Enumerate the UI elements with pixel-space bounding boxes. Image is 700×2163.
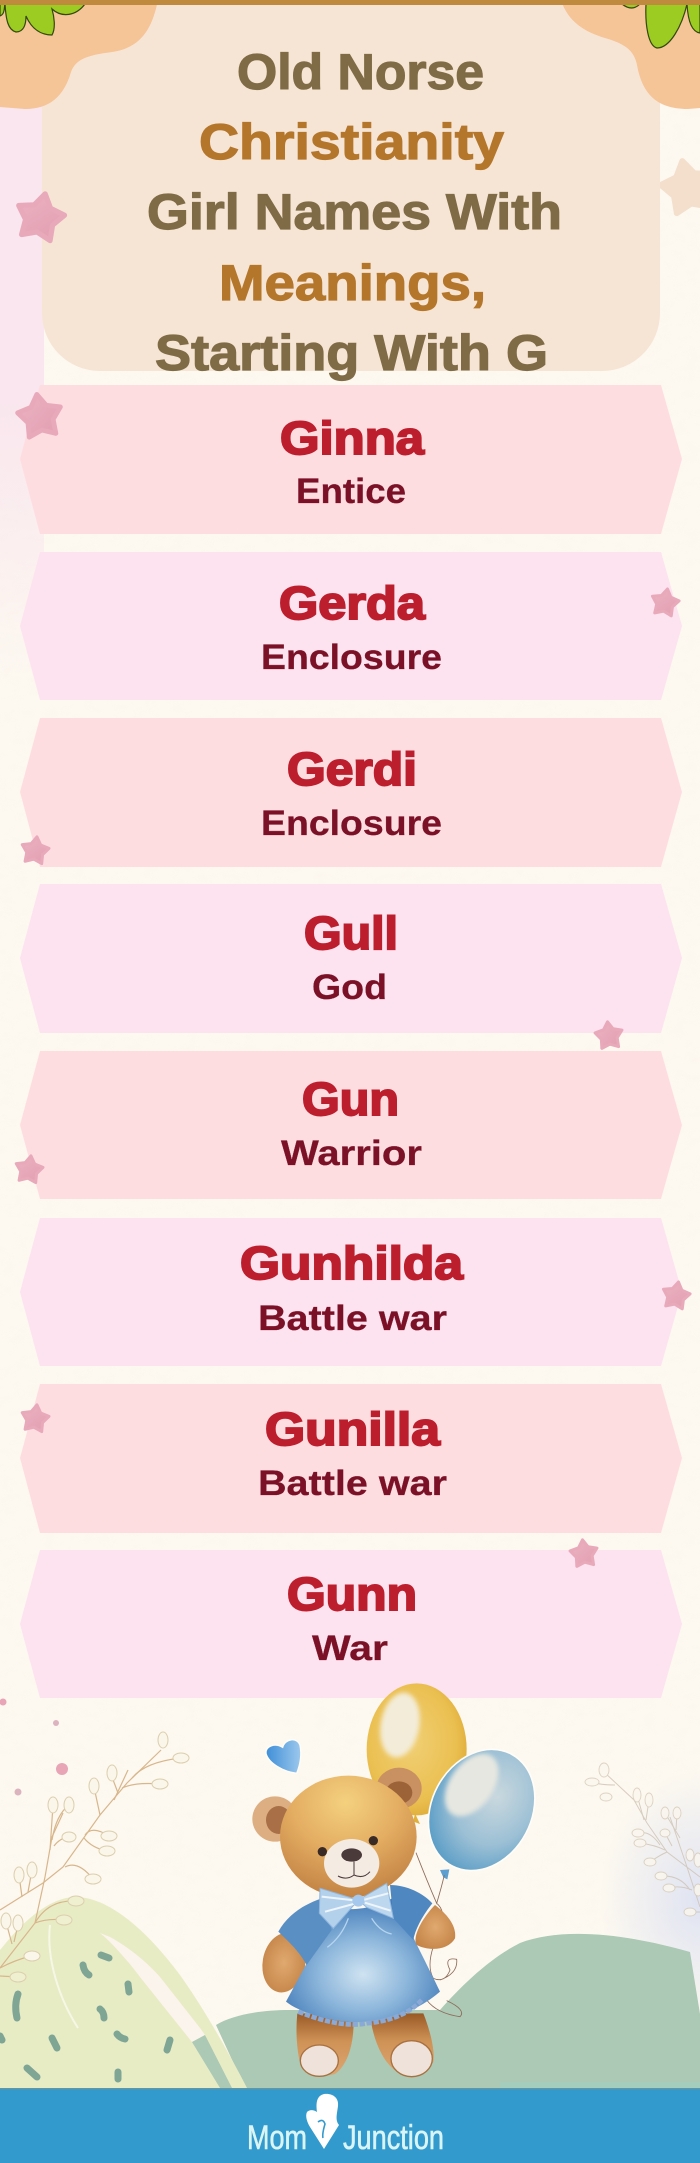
star: beige right of title	[657, 156, 700, 215]
name card: Gunhilda	[20, 1218, 682, 1366]
name card: Gunilla: Gunilla	[265, 1403, 440, 1455]
name card: Gerdi	[20, 718, 682, 867]
title: Old Norse	[237, 44, 484, 100]
icon: blue heart	[266, 1740, 301, 1773]
ear: right	[376, 1768, 422, 1809]
name card: Ginna: Entice	[296, 472, 406, 511]
hand: right	[415, 1905, 455, 1949]
muzzle	[324, 1839, 379, 1888]
name card: Gerda: Gerda	[279, 577, 425, 629]
name card: Gunilla	[20, 1384, 682, 1533]
title	[147, 44, 562, 381]
name card: Gun: Warrior	[281, 1134, 422, 1173]
name card: Gunilla: Battle war	[258, 1464, 447, 1503]
legs	[296, 2013, 434, 2077]
teal hill	[216, 1934, 700, 2088]
name card: Gunn: War	[312, 1629, 388, 1668]
bow	[319, 1883, 393, 1947]
name card: Gunn	[20, 1550, 682, 1698]
logo: MomJunction	[247, 2094, 444, 2157]
branch: right	[585, 1763, 700, 1916]
footer	[0, 2082, 700, 2163]
name card: Gerda	[20, 552, 682, 700]
title: Meanings,	[219, 255, 486, 311]
corner blob: left	[0, 0, 158, 109]
name card: Gunhilda: Battle war	[258, 1299, 447, 1338]
name card: Gull	[20, 884, 682, 1033]
name card: Gerdi: Enclosure	[261, 804, 442, 843]
title: Starting With G	[155, 325, 548, 381]
name card: Gun	[20, 1051, 682, 1199]
green hill	[0, 1897, 247, 2088]
logo: MomJunction: Mom	[247, 2119, 307, 2157]
name card: Gunhilda: Gunhilda	[240, 1237, 463, 1289]
balloon: blue	[408, 1731, 556, 1889]
name card: Ginna: Ginna	[280, 412, 424, 464]
dots	[0, 1698, 68, 1796]
top bar	[0, 0, 700, 5]
ear: left	[252, 1796, 298, 1842]
name card: Gunn: Gunn	[287, 1568, 417, 1620]
name card: Ginna	[20, 385, 682, 534]
eyes	[318, 1836, 378, 1856]
balloon strings	[416, 1853, 462, 2017]
dashes on hill	[0, 1955, 170, 2079]
head	[280, 1776, 417, 1898]
balloon: yellow	[367, 1683, 467, 1824]
name card: Gerdi: Gerdi	[287, 743, 417, 795]
teddy bear with balloons	[252, 1683, 556, 2077]
name card: Gun: Gun	[302, 1073, 399, 1125]
name card: Gerda: Enclosure	[261, 638, 442, 677]
name card: Gull: Gull	[304, 907, 398, 959]
title: Christianity	[199, 114, 504, 170]
name card: Gull: God	[312, 968, 387, 1007]
decorative stars	[13, 189, 692, 1567]
corner blob: right	[561, 0, 700, 109]
panel: title background	[42, 0, 660, 371]
logo: MomJunction: Junction	[343, 2119, 444, 2157]
branch: left	[0, 1732, 189, 1982]
dress	[278, 1885, 440, 2024]
arm: left	[258, 1929, 310, 1996]
leaves: left	[0, 0, 85, 35]
nose and mouth	[338, 1848, 370, 1878]
leaves: right	[622, 0, 700, 48]
title: Girl Names With	[147, 184, 562, 240]
